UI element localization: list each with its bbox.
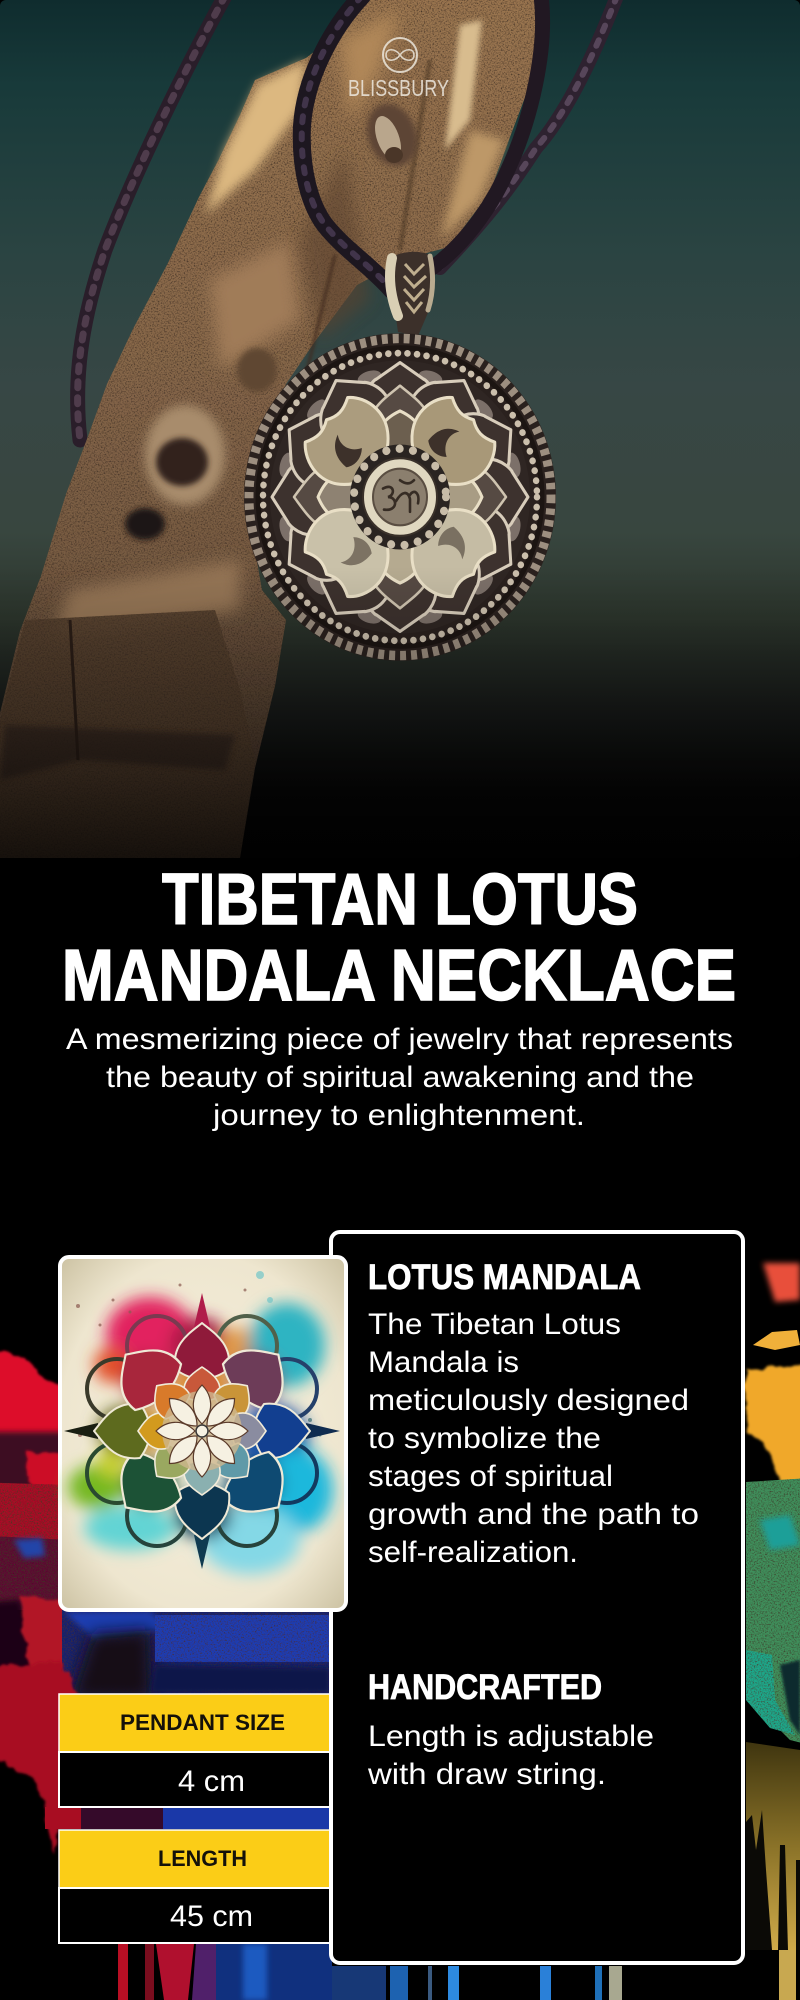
spec table: length: 45 cm (170, 1900, 253, 1933)
spec table: pendant size (59, 1694, 330, 1807)
text block: lotus mandala: The Tibetan Lotus (368, 1308, 621, 1341)
paint drips bottom (118, 1944, 622, 2000)
gap patches (277, 368, 523, 626)
subtitle: the beauty of spiritual awakening and the (106, 1061, 694, 1094)
driftwood trunk (0, 0, 541, 858)
hero photo: necklace on driftwood (0, 0, 800, 858)
spec table: pendant size: 4 cm (178, 1765, 245, 1798)
subtitle (66, 1023, 733, 1132)
large petals (94, 1323, 310, 1539)
text block: handcrafted: Length is adjustable (368, 1720, 654, 1753)
dark knots (145, 405, 225, 505)
text block: lotus mandala: growth and the path to (368, 1498, 699, 1531)
spec table: length: LENGTH (158, 1846, 247, 1871)
heading: handcrafted: HANDCRAFTED (368, 1668, 602, 1707)
text block: lotus mandala: self-realization. (368, 1536, 578, 1569)
spec table: length (59, 1830, 330, 1943)
subtitle: journey to enlightenment. (212, 1099, 585, 1132)
heading: lotus mandala: LOTUS MANDALA (368, 1258, 641, 1297)
centre om disc (363, 458, 437, 536)
text block: lotus mandala: to symbolize the (368, 1422, 601, 1455)
panel: watercolor mandala image (60, 1257, 346, 1610)
photo bottom fade (0, 0, 800, 858)
pendant rim (244, 333, 556, 661)
logo (348, 38, 449, 101)
white core flower (156, 1385, 248, 1477)
petal crescents (326, 420, 474, 574)
knot stub (359, 97, 425, 173)
pendant bail (387, 252, 434, 336)
blue cloud (62, 1610, 332, 1695)
gap strip between spec rows (45, 1807, 81, 1829)
title (62, 860, 736, 1016)
text block: lotus mandala: Mandala is (368, 1346, 519, 1379)
watercolor blobs (68, 1297, 333, 1574)
text block: lotus mandala (368, 1308, 699, 1569)
back cord left (78, 0, 225, 440)
outer petals (271, 362, 529, 632)
logo: BLISSBURY (348, 75, 449, 101)
text block: handcrafted: with draw string. (367, 1758, 606, 1791)
title: TIBETAN LOTUS (162, 860, 638, 940)
lotus petals (296, 388, 504, 606)
rings (87, 1316, 317, 1546)
photo backdrop (0, 0, 800, 858)
paint splash left (0, 1349, 332, 1852)
bead ring (350, 444, 450, 550)
flower drawing (64, 1293, 340, 1569)
subtitle: A mesmerizing piece of jewelry that represents (66, 1023, 733, 1056)
text block: lotus mandala: meticulously designed (368, 1384, 689, 1417)
paint splash right (746, 1263, 800, 2000)
mandala pendant (244, 333, 556, 661)
spec table: pendant size: PENDANT SIZE (120, 1710, 285, 1735)
inner petals (138, 1367, 266, 1495)
panel: description card (331, 1232, 743, 1963)
text block: handcrafted (367, 1720, 654, 1791)
spikes (64, 1293, 340, 1569)
middle star petals (294, 386, 506, 608)
dark bark lower (0, 610, 255, 858)
paint splatter dots (76, 1271, 322, 1437)
text block: lotus mandala: stages of spiritual (368, 1460, 613, 1493)
front cords (302, 0, 617, 290)
